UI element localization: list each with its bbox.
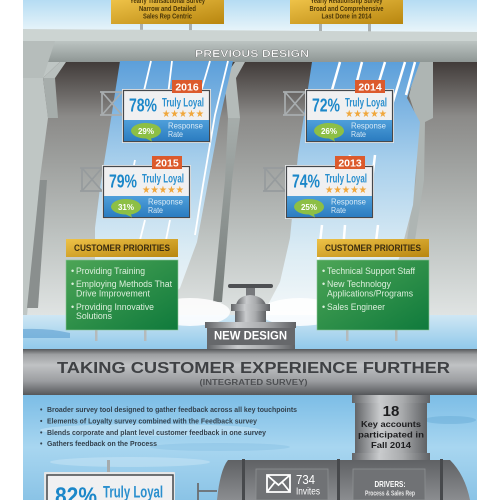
panel: customer priorities right: Sales Engineer — [327, 302, 385, 312]
sign: 2014: Rate — [351, 130, 366, 139]
sign: 2014: ★★★★★ — [345, 109, 387, 120]
sign: 2013 — [263, 156, 374, 219]
sign: 2016: 2016 — [175, 82, 199, 94]
panel: customer priorities left: • — [71, 279, 74, 289]
panel: customer priorities left: Employing Methods That — [76, 279, 172, 289]
response bubble — [294, 199, 324, 218]
subtitle: (INTEGRATED SURVEY) — [200, 378, 308, 387]
panel: customer priorities left: • — [71, 302, 74, 312]
sign: 2015: Truly Loyal — [142, 172, 184, 186]
bullet list: • — [40, 418, 43, 426]
panel: customer priorities left: CUSTOMER PRIORITIES — [74, 243, 170, 254]
sign: 2016: ★★★★★ — [162, 109, 204, 120]
plate: drivers: Process & Sales Rep — [365, 490, 415, 498]
panel: customer priorities left: Drive Improvement — [76, 288, 150, 298]
icon: ladder — [198, 483, 217, 500]
sign: transactional survey — [111, 0, 224, 37]
vertical pipe: Key accounts — [361, 419, 421, 429]
sign: 2014 — [283, 80, 394, 143]
bullet list: • — [40, 430, 43, 437]
title: TAKING CUSTOMER EXPERIENCE FURTHER — [57, 360, 450, 377]
vertical pipe: 18 — [383, 403, 399, 420]
bullet list: Gathers feedback on the Process — [47, 441, 157, 448]
bullet list: Blends corporate and plant level customer feedback in one survey — [47, 430, 266, 437]
icon: envelope — [267, 475, 290, 492]
bullet list: Broader survey tool designed to gather feedback across all key touchpoints — [47, 407, 297, 414]
sign: transactional survey: Sales Rep Centric — [143, 14, 192, 20]
sign: 2013: ★★★★★ — [325, 185, 367, 196]
sign: 2015: Response — [148, 198, 184, 206]
vertical pipe: Fall 2014 — [371, 440, 411, 450]
dam structure — [23, 29, 477, 316]
truss — [80, 168, 102, 191]
sign: 2013: 74% — [292, 172, 320, 192]
panel: customer priorities right: • — [322, 266, 325, 276]
sign: transactional survey: Narrow and Detailed — [139, 6, 196, 13]
bullet list: • — [40, 407, 43, 414]
panel: customer priorities right — [317, 239, 429, 341]
bullet list — [40, 407, 297, 448]
sign: 2013: Rate — [331, 206, 346, 215]
panel: customer priorities left: Providing Innovative — [76, 302, 154, 312]
sign: relationship survey — [290, 0, 403, 37]
vertical pipe: participated in — [358, 430, 424, 440]
panel: customer priorities left: Providing Training — [76, 266, 145, 276]
sign: 2016: Rate — [168, 130, 183, 139]
sign: relationship survey: Last Done in 2014 — [322, 14, 372, 20]
plate: invites: 734 — [296, 472, 315, 487]
year tag — [355, 80, 385, 93]
sign: relationship survey: Broad and Comprehensive — [310, 6, 384, 13]
response bubble — [314, 123, 344, 142]
sign: 82% truly loyal — [44, 460, 175, 500]
plate: invites: Invites — [296, 486, 320, 498]
truss — [283, 92, 305, 115]
waterfall right — [262, 62, 420, 316]
sign: 2014: 72% — [312, 96, 340, 116]
sign: 2015: Rate — [148, 206, 163, 215]
truss — [100, 92, 122, 115]
sign: 2016: 78% — [129, 96, 157, 116]
panel: customer priorities right: • — [322, 279, 325, 289]
waterfall left — [95, 61, 233, 316]
lower sky background — [23, 395, 477, 500]
bullet list: • — [40, 441, 43, 448]
year tag — [152, 156, 182, 169]
sign: 2013: Response — [331, 198, 367, 206]
sign: 2016: Response — [168, 122, 204, 130]
vertical pipe — [352, 395, 430, 462]
plate: drivers: DRIVERS: — [374, 480, 406, 489]
sign: 2016 — [100, 80, 211, 143]
year tag — [335, 156, 365, 169]
year tag — [172, 80, 202, 93]
sign: 2015: 2015 — [155, 158, 179, 170]
plate: drivers — [353, 469, 425, 500]
panel: customer priorities left: Solutions — [76, 311, 112, 321]
sign: 2014: Truly Loyal — [345, 96, 387, 110]
panel: customer priorities right: CUSTOMER PRIORITIES — [325, 243, 421, 254]
pipe banner — [23, 349, 477, 395]
plate: invites — [256, 469, 328, 500]
bullet list: Elements of Loyalty survey combined with the Feedback survey — [47, 418, 257, 426]
response bubble — [131, 123, 161, 142]
sign: 2015: ★★★★★ — [142, 185, 184, 196]
sign: 2015: 79% — [109, 172, 137, 192]
sign: 2014: 2014 — [358, 82, 382, 94]
response bubble — [111, 199, 141, 218]
truss — [263, 168, 285, 191]
sign: 2016: Truly Loyal — [162, 96, 204, 110]
panel: customer priorities left — [66, 239, 178, 341]
water surface — [23, 298, 477, 350]
panel: customer priorities left: • — [71, 266, 74, 276]
sign: 2014: 26% — [321, 127, 337, 136]
panel: customer priorities right: • — [322, 302, 325, 312]
sign: 2015 — [80, 156, 191, 219]
sky background — [23, 0, 477, 32]
tank — [217, 459, 470, 500]
sign: 2015: 31% — [118, 203, 134, 212]
panel: customer priorities right: Technical Support Staff — [327, 266, 415, 276]
sign: 2013: Truly Loyal — [325, 172, 367, 186]
sign: 2016: 29% — [138, 127, 154, 136]
sign: 2014: Response — [351, 122, 387, 130]
icon: valve: NEW DESIGN — [214, 328, 287, 342]
heading: previous design: PREVIOUS DESIGN — [195, 48, 309, 60]
sign: 2013: 2013 — [338, 158, 362, 170]
panel: customer priorities right: New Technology — [327, 279, 391, 289]
icon: valve — [205, 284, 296, 349]
sign: 2013: 25% — [301, 203, 317, 212]
panel: customer priorities right: Applications/Programs — [327, 288, 413, 298]
